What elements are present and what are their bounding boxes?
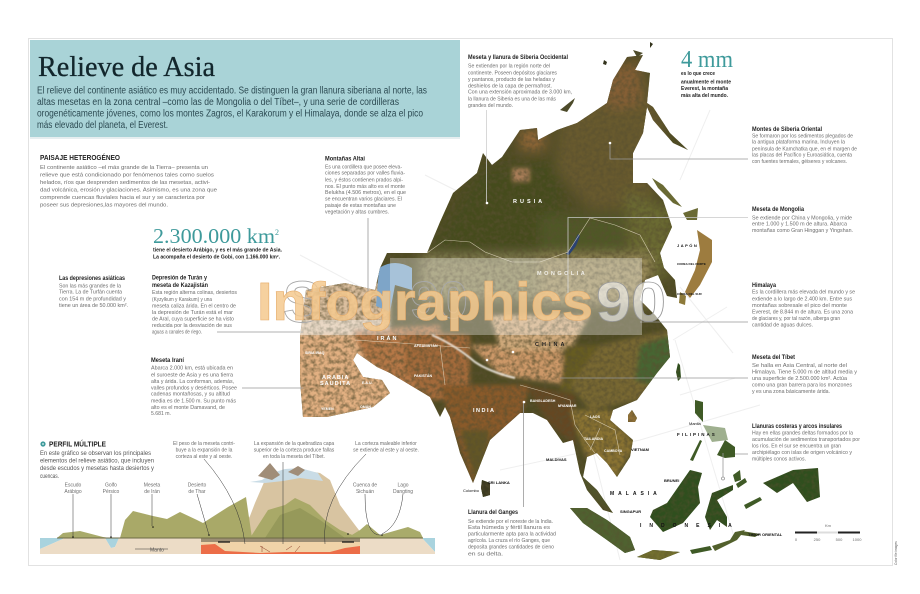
Lake Baikal [566, 234, 580, 255]
text block: las depresiones asiáticas: con 154 m de profundidad y [59, 296, 126, 302]
map labels: ARABIA [322, 375, 349, 381]
profile labels: Dangting [393, 489, 413, 495]
map labels: TIMOR ORIENTAL [748, 532, 783, 537]
profile labels: La expansión de la quebradiza capa [254, 441, 334, 447]
map labels: VIETNAM [631, 447, 650, 452]
text block: depresión de Turán: Depresión de Turán y [152, 274, 207, 282]
profile labels: de Irán [144, 489, 160, 495]
map labels: MALDIVAS [546, 457, 567, 462]
statistic: 4 mm [681, 47, 733, 99]
map labels: Manila [689, 421, 702, 426]
profile labels: La corteza maleable inferior [355, 441, 417, 447]
profile labels: superior de la corteza produce fallas [254, 448, 335, 454]
map labels: MYANMAR [558, 404, 577, 408]
description: cuencas. [40, 473, 59, 480]
text block: depresión de Turán: meseta de Kazajistán [152, 282, 208, 289]
intro text: El relieve del continente asiático es muy accidentado. Se distinguen la gran llanura siberiana al norte, las [37, 86, 427, 96]
text block: meseta del Tíbet: Himalaya. Tiene 5.000 m de altitud media y [752, 369, 857, 375]
text block: montes de Siberia Oriental: Montes de Siberia Oriental [752, 126, 822, 133]
text block: paisaje heterogéneo: helados, ríos que desprenden sedimentos de las mesetas, activi- [40, 180, 210, 186]
text block: meseta iraní: valles profundos y desérticos. Posee [151, 385, 237, 391]
heading [40, 440, 106, 448]
intro text: orogenéticamente jóvenes, como los montes Zagros, el Karakorum y el Himalaya, donde se alza el pico [37, 108, 423, 120]
Caspian and Aral seas [376, 263, 412, 312]
profile labels: buye a la expansión de la [176, 448, 233, 454]
map labels: BANGLADESH [530, 399, 556, 403]
country borders [355, 218, 655, 460]
text block: paisaje heterogéneo [40, 153, 217, 208]
text block: llanura del Ganges [468, 509, 556, 557]
text block: depresión de Turán: la depresión de Turán está el mar [152, 310, 233, 316]
map labels: BRUNEI [664, 478, 679, 483]
map labels: SINGAPUR [620, 509, 641, 514]
map labels: OMÁN [360, 404, 371, 409]
text block: montes de Siberia Oriental: Se formaron por los sedimentos plegados de [752, 133, 853, 139]
text block: meseta de Mongolia: Meseta de Mongolia [752, 206, 804, 213]
title panel [30, 40, 460, 139]
text block: montañas Altai: nos. El punto más alto es el monte [325, 184, 405, 190]
text block: meseta del Tíbet [752, 354, 857, 395]
text block: meseta de Mongolia: montañas como Gran Hinggan y Yingshan. [752, 228, 853, 234]
profile labels: El peso de la meseta contri- [173, 441, 235, 447]
text block: montes de Siberia Oriental: las placas del Pacífico y Euroasiática, cuenta [752, 153, 853, 159]
text block: meseta iraní: media es de 1.500 m. Su punto más [151, 398, 236, 404]
text block: llanuras costeras y arcos insulares: múltiples conos activos. [752, 456, 806, 462]
text block: meseta iraní: el suroeste de Asia y es una tierra [151, 372, 234, 378]
watermark: S [283, 270, 322, 335]
map labels: JAPÓN [677, 243, 698, 248]
text block: meseta del Tíbet: Se halla en Asia Central, al norte del [752, 363, 847, 369]
map labels: AFGANISTÁN [414, 343, 438, 348]
map labels: IRÁN [377, 335, 398, 342]
heading: PERFIL MÚLTIPLE [49, 440, 106, 448]
map labels: INDONESIA [640, 523, 740, 529]
text block: paisaje heterogéneo: comprende cuencas fluviales hacia el sur y se caracteriza por [40, 195, 205, 201]
profile labels: Arábigo [64, 489, 82, 495]
text block: montañas Altai: paisaje de estas montañas une [325, 203, 396, 209]
text block: montañas Altai: se encuentran varios glaciares. El [325, 197, 402, 203]
text block: meseta del Tíbet: como una gran barrera para los monzones [752, 382, 852, 388]
text block: meseta y llanura de Siberia Occidental: continente. Poseen depósitos glaciares [468, 71, 557, 77]
text block: meseta de Mongolia [752, 206, 853, 234]
text block: las depresiones asiáticas [59, 275, 128, 309]
text block: montes de Siberia Oriental: la antigua plataforma marina. Incluyen la [752, 140, 846, 146]
landmass with relief colouring [290, 40, 690, 520]
text block: paisaje heterogéneo: PAISAJE HETEROGÉNEO [40, 153, 121, 162]
text block: paisaje heterogéneo: relieve que está condicionado por fenómenos tales como suelos [40, 172, 214, 178]
watermark: Infographics [257, 272, 593, 332]
text block: meseta del Tíbet: y es una zona básicamente árida. [752, 389, 830, 395]
map labels: Colombo [463, 488, 480, 493]
map labels: PAKISTÁN [414, 373, 433, 378]
map labels: TAILANDIA [584, 437, 604, 441]
text block: las depresiones asiáticas: Son las más grandes de la [59, 284, 122, 290]
text block: Himalaya: Es la cordillera más elevada del mundo y se [752, 290, 855, 296]
map labels: YEMEN [321, 407, 334, 411]
text block: llanuras costeras y arcos insulares: acumulación de sedimentos transportados por [752, 437, 860, 443]
map labels: MONGOLIA [537, 271, 587, 277]
map graticule [300, 110, 760, 560]
scale bar [795, 523, 862, 542]
statistic: 4 mm: 4 mm [681, 47, 733, 73]
text block: depresión de Turán [152, 274, 237, 336]
text block: meseta y llanura de Siberia Occidental: y pantanos, producto de las heladas y [468, 77, 555, 83]
text block: Himalaya: de glaciares y, por tal razón, alberga gran [752, 316, 840, 322]
map labels: INDIA [473, 408, 495, 414]
text block: montes de Siberia Oriental: península de Kamchatka que, en el margen de [752, 146, 857, 152]
profile labels: Lago [397, 482, 409, 488]
text block: montañas Altai: les, y éstos contienen prados alpi- [325, 178, 403, 184]
text block: depresión de Turán: de Aral, cuya superficie se ha visto [152, 317, 234, 323]
profile chart: Manto [150, 548, 164, 554]
text block: meseta iraní: alta y árida. La conforman, además, [151, 379, 234, 385]
text block: montañas Altai: Montañas Altai [325, 156, 365, 163]
description: En este gráfico se observan los principales [40, 450, 151, 457]
text block: llanura del Ganges: particularmente apta para la actividad [468, 532, 556, 538]
profile labels: Desierto [188, 482, 207, 488]
map labels: LAOS [590, 415, 601, 419]
image credit: Color file images [894, 541, 898, 565]
profile labels: Cuenca de [353, 482, 377, 488]
map labels: Mascate [392, 392, 406, 396]
map labels: FILIPINAS [677, 432, 717, 437]
text block: Himalaya: extiende a lo largo de 2.400 km. Entre sus [752, 296, 852, 302]
text block: llanura del Ganges: Esta húmeda y fértil llanura es [468, 525, 550, 531]
text block: montañas Altai: vegetación y altas cumbres. [325, 210, 389, 216]
map labels: E.A.U. [362, 381, 373, 385]
map labels: CAMBOYA [604, 449, 623, 453]
text block: depresión de Turán: (Kyzylkum y Karakum) y una [152, 297, 213, 303]
profile labels: en toda la meseta del Tíbet. [263, 454, 325, 460]
smaller islands [690, 400, 762, 554]
text block: montañas Altai: ciones separadas por valles fluvia- [325, 171, 405, 177]
text block: depresión de Turán: aguas a canales de riego. [152, 330, 202, 336]
text block: meseta y llanura de Siberia Occidental: Con una extensión aproximada de 3.000 km, [468, 90, 572, 96]
text block: llanura del Ganges: deposita grandes cantidades de cieno [468, 545, 554, 551]
text block: llanuras costeras y arcos insulares: archipiélago con islas de origen volcánico y [752, 450, 852, 456]
text block: meseta y llanura de Siberia Occidental: la llanura de Siberia es una de las más [468, 96, 556, 102]
text block: montañas Altai [325, 156, 406, 216]
text block: las depresiones asiáticas: tiene un área de 50.000 km². [59, 303, 128, 309]
text block: montañas Altai: Es una cordillera que posee eleva- [325, 165, 402, 171]
statistic: 4 mm: Everest, la montaña [681, 86, 728, 92]
map of Asia [290, 40, 830, 565]
text block: paisaje heterogéneo: El continente asiático –el más grande de la Tierra– presenta un [40, 165, 208, 171]
watermark: 90 [596, 270, 666, 333]
text block: montañas Altai: Belukha (4.506 metros), en el que [325, 190, 406, 196]
Himalaya snow [432, 335, 515, 378]
profile labels: Pérsico [103, 489, 120, 495]
text block: meseta y llanura de Siberia Occidental [468, 54, 572, 109]
profile labels: corteza al este y al oeste. [176, 454, 232, 460]
text block: meseta de Mongolia: entre 1.000 y 1.500 m de altura. Abarca [752, 221, 848, 227]
intro text: más elevado del planeta, el Everest. [37, 120, 168, 131]
text block: Himalaya: Everest, de 8.844 m de altura. Es una zona [752, 309, 854, 315]
text block: meseta y llanura de Siberia Occidental: Se extienden por la región norte del [468, 64, 550, 70]
description: desde escudos y mesetas hasta desiertos y [40, 465, 155, 472]
statistic: 2.300.000 km2 [153, 224, 283, 260]
profile chart [40, 454, 435, 554]
profile labels: de Thar [188, 489, 206, 495]
text block: meseta iraní: 5.681 m. [151, 411, 171, 417]
text block: meseta y llanura de Siberia Occidental: Meseta y llanura de Siberia Occidental [468, 54, 568, 61]
statistic: 4 mm: más alta del mundo. [681, 93, 729, 99]
text block: montes de Siberia Oriental [752, 126, 857, 165]
text block: llanura del Ganges: agrícola. La cruza el río Ganges, que [468, 538, 550, 544]
profile labels: Sichuán [356, 489, 374, 495]
profile labels: Meseta [144, 482, 160, 488]
text block: Himalaya: cantidad de aguas dulces. [752, 322, 813, 328]
scale bar: 250 [814, 537, 821, 542]
text block: llanuras costeras y arcos insulares [752, 423, 860, 462]
text block: meseta iraní [151, 357, 237, 417]
text block: meseta de Mongolia: Se extiende por China y Mongolia, y mide [752, 215, 852, 221]
map labels: COREA DEL NORTE [677, 262, 706, 266]
text block: llanuras costeras y arcos insulares: Llanuras costeras y arcos insulares [752, 423, 842, 430]
map labels: COREA DEL SUR [677, 292, 703, 296]
statistic: 2.300.000 km2: tiene el desierto Arábigo, y es el más grande de Asia. [153, 248, 283, 254]
watermark: 90 [410, 272, 468, 330]
scale bar: 1000 [853, 537, 862, 542]
statistic: 4 mm: es lo que crece [681, 71, 715, 77]
map labels: SAUDITA [320, 381, 351, 387]
text block: meseta del Tíbet: Meseta del Tíbet [752, 354, 795, 361]
profile labels [64, 441, 419, 495]
text block: llanuras costeras y arcos insulares: los ríos. En el sur se encuentra un gran [752, 443, 841, 449]
text block: llanura del Ganges: Llanura del Ganges [468, 509, 518, 516]
map labels: SRI LANKA [488, 480, 510, 485]
text block: paisaje heterogéneo: dad volcánica, erosión y glaciaciones. Asimismo, es una zona que [40, 188, 217, 194]
text block: meseta del Tíbet: una superficie de 2.500.000 km². Actúa [752, 376, 848, 382]
islands [481, 363, 820, 560]
multiple profile section [40, 440, 435, 554]
map labels [305, 199, 783, 537]
text block: las depresiones asiáticas: Tierra. La de Turfán cuenta [59, 290, 123, 296]
text block: Himalaya: Himalaya [752, 282, 776, 289]
statistic: 2.300.000 km2: 2.300.000 km [153, 224, 275, 248]
statistic: 2.300.000 km2: 2 [275, 228, 279, 237]
text block: las depresiones asiáticas: Las depresiones asiáticas [59, 275, 125, 282]
title: Relieve de Asia [38, 51, 215, 83]
text block: llanuras costeras y arcos insulares: Hay en ellas grandes deltas formados por la [752, 431, 854, 437]
watermark [257, 258, 666, 335]
text block: paisaje heterogéneo: poseer sus depresiones,las mayores del mundo. [40, 202, 168, 208]
map labels: RUSIA [513, 199, 545, 205]
text block: meseta y llanura de Siberia Occidental: grandes del mundo. [468, 103, 513, 109]
scale bar: 500 [836, 537, 843, 542]
text block: Himalaya [752, 282, 855, 328]
description: elementos del relieve asiático, que incluyen [40, 458, 155, 465]
profile labels: Escudo [65, 482, 82, 488]
intro text [37, 86, 427, 131]
map labels: SIRIA IRAQ [305, 351, 325, 355]
text block: depresión de Turán: reducida por la desviación de sus [152, 323, 232, 329]
text block: Himalaya: montañas sobresale el pico del monte [752, 303, 847, 309]
text block: meseta iraní: cadenas montañosas, y su altitud [151, 392, 230, 398]
statistic: 4 mm: anualmente el monte [681, 80, 731, 86]
scale bar: Km [825, 523, 832, 528]
text block: depresión de Turán: meseta caliza árida. En el centro de [152, 304, 236, 310]
map labels: MALASIA [610, 491, 661, 497]
intro text: altas mesetas en la zona central –como las de Mongolia o del Tíbet–, y una serie de cordilleras [37, 97, 399, 108]
map labels: CHINA [535, 342, 567, 348]
text block: meseta iraní: Abarca 2.000 km, está ubicada en [151, 366, 233, 372]
text block: llanura del Ganges: Se extiende por el noreste de la India. [468, 519, 553, 525]
scale bar: 0 [795, 537, 798, 542]
text block: depresión de Turán: Esta región alterna colinas, desiertos [152, 290, 237, 296]
text block: llanura del Ganges: en su delta. [468, 551, 504, 557]
text block: meseta iraní: Meseta Iraní [151, 357, 184, 364]
profile labels: Golfo [105, 482, 117, 488]
text block: montes de Siberia Oriental: con fuentes termales, géiseres y volcanes. [752, 159, 847, 165]
description [40, 450, 155, 480]
leader lines [217, 110, 748, 507]
profile labels: se extiende al este y al oeste. [353, 448, 419, 454]
statistic: 2.300.000 km2: La acompaña el desierto de Gobi, con 1.166.000 km². [153, 254, 281, 260]
text block: meseta y llanura de Siberia Occidental: deshielos de la capa de permafrost. [468, 84, 552, 90]
text block: meseta iraní: alto es el monte Damavand, de [151, 405, 225, 411]
